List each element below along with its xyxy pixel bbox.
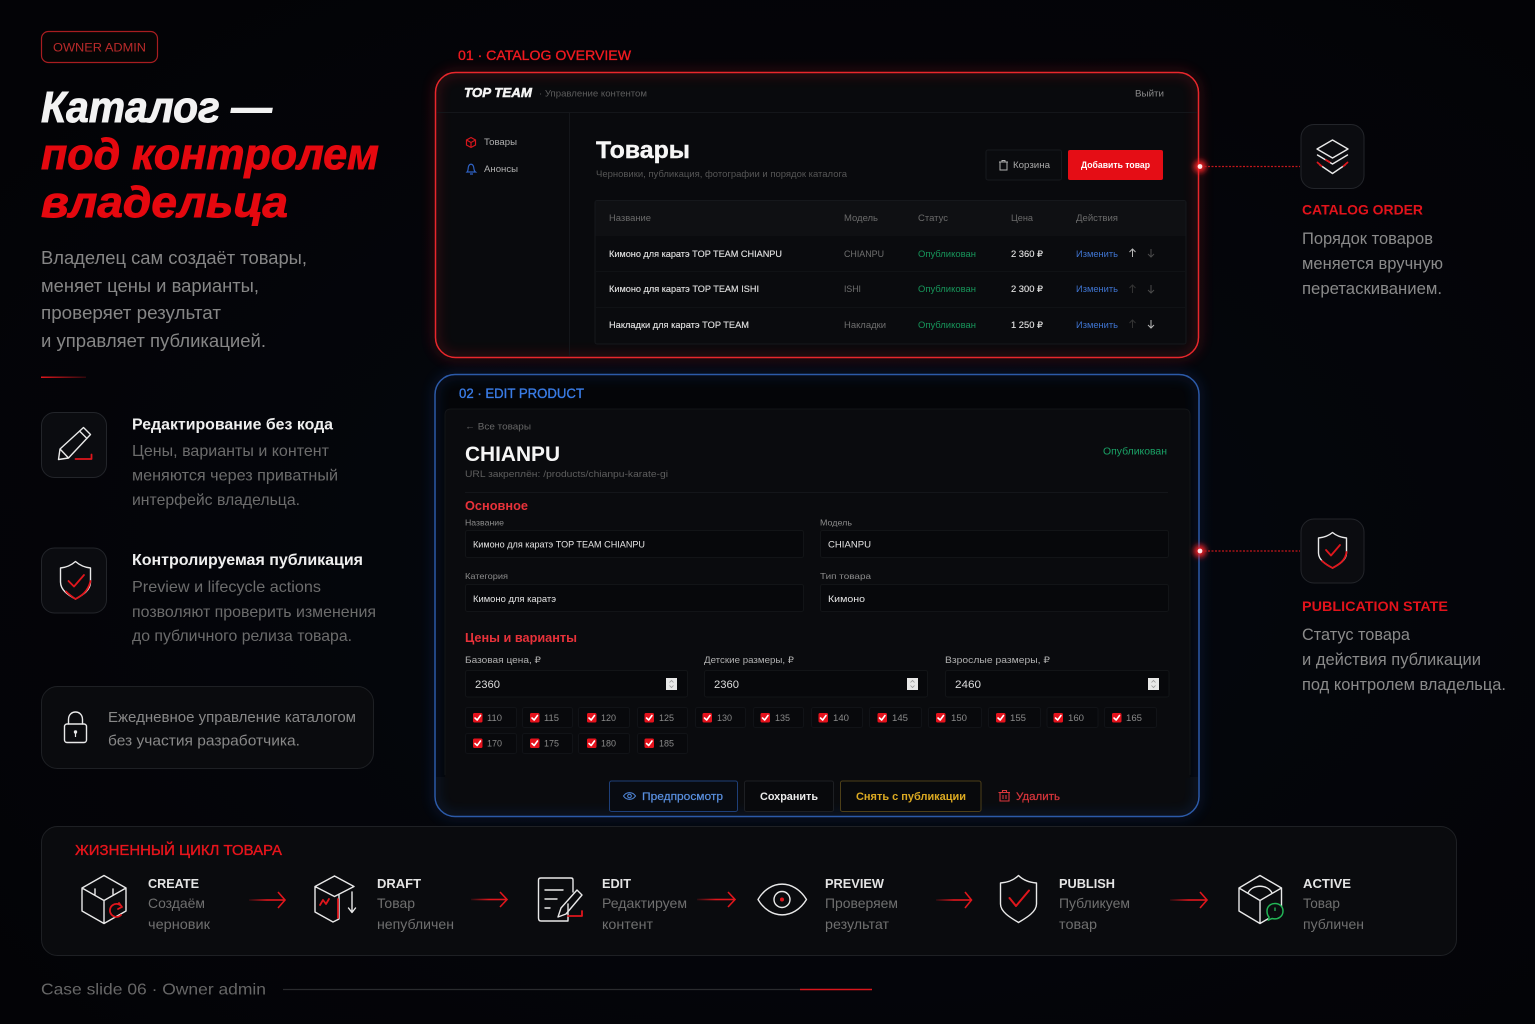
table header: Действия [1076, 213, 1118, 223]
row: ishi: 2 300 ₽ [1011, 284, 1043, 294]
title: владельца [41, 178, 288, 227]
callout: publication state [1194, 519, 1506, 694]
step: edit: Редактируем [602, 895, 687, 911]
product header: ← Все товары [465, 422, 531, 432]
icon: shield state [1301, 519, 1364, 583]
sidebar nav: Товары [484, 137, 517, 147]
size checkboxes: 185 [659, 738, 674, 750]
section: prices and variants: 2460 [955, 679, 981, 691]
section: prices and variants: 2360 [714, 679, 739, 691]
arrow [471, 892, 507, 907]
row: chianpu: 2 360 ₽ [1011, 249, 1043, 259]
row: pads [609, 320, 1154, 330]
step: edit: EDIT [602, 876, 631, 891]
footer: Case slide 06 · Owner admin [41, 982, 266, 998]
row: chianpu: Опубликован [918, 249, 976, 259]
step: publish: Публикуем [1059, 895, 1130, 911]
callout: publication state: Статус товара [1302, 626, 1411, 644]
callout: catalog order: Порядок товаров [1302, 230, 1433, 248]
step: preview: результат [825, 916, 890, 932]
section: basic fields: Кимоно для каратэ TOP TEAM CHIANPU [473, 540, 645, 550]
heading: lifecycle: ЖИЗНЕННЫЙ ЦИКЛ ТОВАРА [75, 841, 282, 859]
section: prices and variants: 2360 [475, 679, 500, 691]
button: delete [998, 790, 1060, 803]
step: create: Создаём [148, 895, 205, 911]
size checkboxes: 145 [892, 713, 908, 724]
step: create: черновик [148, 916, 211, 932]
badge: owner admin: OWNER ADMIN [53, 40, 146, 54]
row: ishi: Изменить [1076, 284, 1118, 294]
section: prices and variants: Базовая цена, ₽ [465, 655, 541, 665]
step: draft: Товар [377, 895, 415, 911]
arrow [249, 892, 285, 908]
form card [445, 409, 1190, 778]
step: create [82, 876, 211, 932]
row: ishi: Опубликован [918, 284, 976, 294]
icon: pencil [42, 412, 106, 478]
callout: catalog order: CATALOG ORDER [1302, 202, 1423, 218]
button: save [744, 781, 834, 812]
callout: publication state: под контролем владельца. [1302, 676, 1506, 694]
row: chianpu: CHIANPU [844, 249, 884, 259]
icon: shield [42, 548, 106, 613]
feature: controlled publication: Preview и lifecycle actions [132, 579, 321, 596]
table header [609, 213, 1118, 223]
button: save: Сохранить [760, 791, 818, 803]
row: chianpu [609, 249, 1154, 259]
row: pads: Изменить [1076, 320, 1118, 330]
size checkboxes: 155 [1010, 713, 1026, 724]
section: prices and variants: Цены и варианты [465, 630, 577, 645]
size checkboxes: 150 [951, 713, 967, 724]
icon: bell blue [467, 164, 476, 174]
product header: Опубликован [1103, 446, 1167, 458]
section: basic fields: Кимоно для каратэ [473, 594, 556, 605]
title: Каталог — [41, 83, 273, 132]
callout: catalog order: перетаскиванием. [1302, 280, 1442, 298]
callout: catalog order: меняется вручную [1302, 255, 1443, 273]
row: chianpu: Изменить [1076, 249, 1118, 259]
size checkboxes [466, 708, 1156, 754]
step: active: Товар [1303, 895, 1340, 911]
step: active: ACTIVE [1303, 876, 1351, 891]
size checkboxes: 120 [601, 713, 616, 724]
size checkboxes: 140 [833, 713, 849, 724]
callout: publication state: и действия публикации [1302, 651, 1481, 669]
callout: daily management [42, 686, 374, 768]
callout: catalog order [1194, 124, 1443, 298]
row: pads: 1 250 ₽ [1011, 320, 1043, 330]
row: pads: Опубликован [918, 320, 976, 330]
section: prices and variants: Детские размеры, ₽ [704, 655, 794, 665]
size checkboxes: 165 [1126, 713, 1142, 724]
step: draft [315, 876, 454, 932]
subtitle: Черновики, публикация, фотографии и порядок каталога [596, 169, 848, 180]
button: trash [986, 150, 1062, 180]
arrow [1170, 892, 1207, 908]
feature: controlled publication [42, 548, 376, 645]
section: basic fields: Модель [820, 518, 853, 528]
button: preview: Предпросмотр [642, 791, 723, 803]
icon: layers [1301, 124, 1364, 188]
intro paragraph: меняет цены и варианты, [41, 276, 259, 296]
app header [464, 85, 1164, 100]
size checkboxes: 170 [487, 738, 502, 750]
connector: publication state [1194, 545, 1300, 557]
size checkboxes: 115 [544, 713, 559, 724]
app header: · Управление контентом [539, 88, 647, 100]
arrow [697, 892, 735, 907]
size checkboxes: 135 [775, 713, 790, 724]
size checkboxes: 180 [601, 738, 616, 750]
size checkboxes: 125 [659, 713, 674, 724]
feature: editing without code: Редактирование без кода [132, 416, 333, 434]
icon: lock [64, 712, 86, 742]
panel: edit product [435, 374, 1199, 816]
section: basic fields: CHIANPU [828, 540, 871, 550]
callout: daily management: Ежедневное управление каталогом [108, 709, 356, 726]
product header: CHIANPU [465, 443, 560, 466]
title: под контролем [41, 130, 379, 179]
step: preview: Проверяем [825, 895, 898, 911]
connector: catalog order [1194, 160, 1300, 172]
step: active: публичен [1303, 916, 1364, 932]
table header: Цена [1011, 213, 1033, 223]
callout: daily management: без участия разработчика. [108, 732, 300, 750]
icon: shield check [1000, 876, 1036, 922]
row: pads: Накладки [844, 320, 886, 330]
heading: edit product: 02 · EDIT PRODUCT [459, 385, 584, 401]
callout: publication state: PUBLICATION STATE [1302, 598, 1448, 614]
step: publish [1000, 876, 1130, 932]
button: unpublish: Снять с публикации [856, 791, 966, 803]
size checkboxes: 110 [487, 713, 502, 724]
button: preview [610, 781, 738, 812]
table header: Модель [844, 213, 878, 223]
table: products [595, 200, 1186, 344]
app header: TOP TEAM [464, 85, 533, 100]
table header: Статус [918, 213, 949, 223]
step: draft: непубличен [377, 916, 454, 932]
button: add product [1068, 150, 1163, 180]
feature: controlled publication: позволяют проверить изменения [132, 604, 376, 621]
size checkboxes: 130 [717, 713, 732, 724]
arrow [936, 892, 972, 908]
intro paragraph: проверяет результат [41, 303, 221, 323]
icon: box [82, 876, 126, 924]
heading: products: Товары [596, 137, 690, 164]
step: draft: DRAFT [377, 876, 421, 891]
section: basic fields: Категория [465, 571, 508, 581]
feature: editing without code: меняются через приватный [132, 468, 338, 484]
icon: eye [758, 884, 806, 915]
feature: editing without code: интерфейс владельца. [132, 492, 300, 509]
section: basic fields: Основное [465, 498, 528, 513]
row: ishi: ISHI [844, 284, 861, 294]
icon: cube red [466, 138, 476, 148]
step: preview [758, 876, 898, 932]
size checkboxes: 160 [1068, 713, 1084, 724]
badge: owner admin [42, 32, 158, 62]
app header: Выйти [1135, 88, 1164, 100]
heading: catalog overview: 01 · CATALOG OVERVIEW [458, 47, 632, 63]
feature: controlled publication: Контролируемая публикация [132, 552, 363, 569]
section: basic fields: Название [465, 518, 504, 528]
step: preview: PREVIEW [825, 876, 885, 891]
row: ishi [609, 284, 1154, 294]
feature: editing without code [42, 412, 338, 509]
step: edit: контент [602, 916, 654, 932]
panel: catalog overview [436, 72, 1198, 358]
button: delete: Удалить [1016, 791, 1060, 803]
section: basic fields: Тип товара [820, 571, 871, 581]
product header: URL закреплён: /products/chianpu-karate-gi [465, 469, 668, 480]
size checkboxes: 175 [544, 738, 559, 750]
sidebar nav [466, 137, 518, 174]
row: chianpu: Кимоно для каратэ TOP TEAM CHIANPU [609, 249, 782, 259]
step: edit [538, 876, 687, 932]
product header [465, 422, 1167, 480]
section: prices and variants [465, 630, 1169, 697]
icon: document pencil [538, 878, 582, 921]
panel: product lifecycle [42, 826, 1456, 956]
icon: draft box [315, 876, 356, 922]
sidebar nav: Анонсы [484, 164, 518, 174]
row: ishi: Кимоно для каратэ TOP TEAM ISHI [609, 284, 759, 294]
intro paragraph [41, 248, 307, 351]
feature: editing without code: Цены, варианты и контент [132, 443, 330, 460]
section: prices and variants: Взрослые размеры, ₽ [945, 655, 1050, 665]
button: unpublish [840, 781, 981, 812]
row: pads: Накладки для каратэ TOP TEAM [609, 320, 749, 330]
feature: controlled publication: до публичного релиза товара. [132, 628, 352, 645]
button: add product: Добавить товар [1081, 160, 1150, 171]
step: active [1239, 876, 1364, 932]
intro paragraph: и управляет публикацией. [41, 331, 266, 351]
step: publish: товар [1059, 916, 1097, 932]
section: basic fields: Кимоно [828, 594, 865, 605]
icon: box active [1239, 876, 1283, 924]
section: basic fields [465, 498, 1168, 612]
step: publish: PUBLISH [1059, 876, 1115, 891]
title [41, 83, 379, 227]
step: create: CREATE [148, 876, 199, 891]
button: trash: Корзина [1013, 160, 1051, 171]
table header: Название [609, 213, 651, 223]
intro paragraph: Владелец сам создаёт товары, [41, 248, 307, 268]
